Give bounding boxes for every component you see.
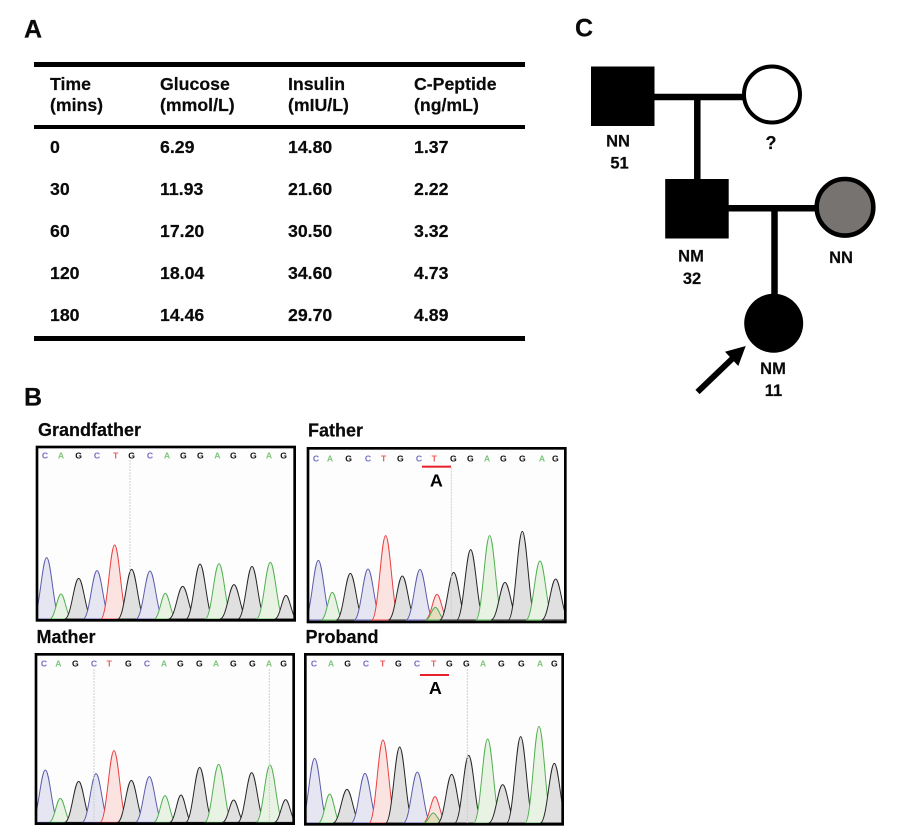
table row: time 180 <box>50 305 449 325</box>
chromatogram: Mather <box>19 654 297 824</box>
table row: time 120: 120 <box>50 263 80 283</box>
panel: C pedigree <box>575 14 873 400</box>
base calls: Father: A <box>327 453 334 463</box>
base calls: Proband: G <box>463 658 470 668</box>
base calls: Grandfather <box>42 450 287 460</box>
symbol: mother circle <box>817 179 873 236</box>
peaks: Proband trace <box>289 726 568 823</box>
connector: parents to proband <box>728 208 820 294</box>
table row: time 180: 4.89 <box>414 305 449 325</box>
label: father genotype and age <box>678 248 704 288</box>
table header row: Time <box>50 74 91 94</box>
base calls: Father: G <box>519 453 526 463</box>
mutation marker: T to A: A <box>430 470 443 490</box>
base calls: Proband: G <box>551 658 558 668</box>
base calls: Mather: C <box>144 658 151 668</box>
base calls: Mather: G <box>230 658 237 668</box>
base calls: Mather: G <box>72 658 79 668</box>
panel: A glucose tolerance table <box>24 16 525 341</box>
symbol: grandmother circle <box>744 66 800 122</box>
base calls: Proband: C <box>414 658 421 668</box>
base calls: Proband: A <box>537 658 544 668</box>
table header row: Insulin <box>288 74 345 94</box>
symbol: proband circle <box>744 294 803 353</box>
table row: time 30: 30 <box>50 179 70 199</box>
mutation marker: T to A <box>422 466 451 490</box>
base calls: Grandfather: G <box>230 450 237 460</box>
base calls: Grandfather: G <box>250 450 257 460</box>
base calls: Father: C <box>416 453 423 463</box>
table header row: (mIU/L) <box>288 95 349 115</box>
peaks: Father trace <box>289 531 570 620</box>
table row: time 30: 21.60 <box>288 179 332 199</box>
base calls: Grandfather: G <box>197 450 204 460</box>
table header row: C-Peptide <box>414 74 497 94</box>
table header row: (mmol/L) <box>160 95 235 115</box>
base calls: Father: G <box>500 453 507 463</box>
base calls: Grandfather: G <box>280 450 287 460</box>
base calls: Grandfather: A <box>164 450 171 460</box>
base calls: Proband <box>311 658 558 668</box>
base calls: Father: A <box>484 453 491 463</box>
table row: time 30: 2.22 <box>414 179 449 199</box>
chromatogram: Father <box>289 448 570 622</box>
peaks: Mather trace <box>19 751 297 822</box>
heading: Grandfather: Grandfather <box>38 420 141 440</box>
table row: time 180: 29.70 <box>288 305 332 325</box>
table row: time 0: 0 <box>50 137 60 157</box>
table header row: Glucose <box>160 74 230 94</box>
base calls: Father: T <box>432 453 438 463</box>
base calls: Proband: C <box>311 658 318 668</box>
chromatogram: Proband <box>289 654 568 824</box>
base calls: Grandfather: C <box>42 450 49 460</box>
base calls: Proband: G <box>344 658 351 668</box>
base calls: Mather: C <box>41 658 48 668</box>
base calls: Mather <box>41 658 287 668</box>
base calls: Mather: C <box>91 658 98 668</box>
base calls: Mather: G <box>125 658 132 668</box>
base calls: Proband: G <box>498 658 505 668</box>
base calls: Grandfather: A <box>266 450 273 460</box>
base calls: Proband: C <box>363 658 370 668</box>
table row: time 60: 60 <box>50 221 70 241</box>
base calls: Grandfather: G <box>75 450 82 460</box>
table row: time 0: 14.80 <box>288 137 332 157</box>
label: father genotype and age: 32 <box>683 270 701 288</box>
base calls: Father: C <box>313 453 320 463</box>
label: grandmother unknown: ? <box>766 133 776 153</box>
base calls: Father: G <box>345 453 352 463</box>
table row: time 0 <box>50 137 449 157</box>
base calls: Father: G <box>552 453 559 463</box>
base calls: Proband: G <box>446 658 453 668</box>
table header row: (ng/mL) <box>414 95 479 115</box>
heading: Father: Father <box>308 420 363 440</box>
label: father genotype and age: NM <box>678 248 704 266</box>
base calls: Mather: A <box>213 658 220 668</box>
panel letter B: B <box>24 384 42 412</box>
table row: time 120: 4.73 <box>414 263 449 283</box>
base calls: Father: G <box>397 453 404 463</box>
label: grandfather genotype and age: 51 <box>610 154 629 172</box>
table header row: (mins) <box>50 95 103 115</box>
arrow: proband indicator <box>698 346 746 392</box>
base calls: Father: A <box>539 453 546 463</box>
table row: time 0: 1.37 <box>414 137 449 157</box>
peaks: Grandfather trace <box>19 545 297 619</box>
label: grandfather genotype and age: NN <box>606 132 630 150</box>
base calls: Grandfather: G <box>180 450 187 460</box>
table row: time 180: 14.46 <box>160 305 204 325</box>
base calls: Mather: A <box>55 658 62 668</box>
label: proband genotype and age <box>760 360 786 400</box>
base calls: Mather: G <box>177 658 184 668</box>
table row: time 60: 30.50 <box>288 221 332 241</box>
base calls: Proband: G <box>518 658 525 668</box>
base calls: Father <box>313 453 559 463</box>
mutation marker: T to A: A <box>429 678 442 698</box>
table row: time 180: 180 <box>50 305 80 325</box>
base calls: Grandfather: C <box>94 450 101 460</box>
table row: time 0: 6.29 <box>160 137 195 157</box>
base calls: Proband: A <box>328 658 335 668</box>
base calls: Mather: A <box>266 658 273 668</box>
label: proband genotype and age: 11 <box>765 382 782 400</box>
base calls: Father: G <box>450 453 457 463</box>
table row: time 60 <box>50 221 449 241</box>
base calls: Father: G <box>467 453 474 463</box>
label: grandfather genotype and age <box>606 132 630 172</box>
base calls: Grandfather: T <box>113 450 119 460</box>
symbol: father square <box>665 179 729 238</box>
table row: time 120: 18.04 <box>160 263 204 283</box>
label: mother genotype: NN <box>829 249 853 267</box>
panel letter C: C <box>575 14 593 42</box>
table row: time 120 <box>50 263 449 283</box>
base calls: Grandfather: C <box>147 450 154 460</box>
base calls: Mather: G <box>249 658 256 668</box>
table row: time 30 <box>50 179 449 199</box>
table row: time 120: 34.60 <box>288 263 332 283</box>
heading: Proband: Proband <box>306 627 379 647</box>
base calls: Grandfather: A <box>214 450 221 460</box>
table row: time 60: 3.32 <box>414 221 449 241</box>
base calls: Proband: G <box>395 658 402 668</box>
base calls: Mather: G <box>196 658 203 668</box>
base calls: Grandfather: G <box>128 450 135 460</box>
base calls: Mather: G <box>280 658 287 668</box>
heading: Mather: Mather <box>36 627 96 647</box>
base calls: Mather: T <box>107 658 113 668</box>
table header row <box>50 74 497 115</box>
table row: time 60: 17.20 <box>160 221 204 241</box>
connector: grandparents <box>654 97 745 180</box>
base calls: Proband: T <box>431 658 437 668</box>
base calls: Proband: T <box>380 658 386 668</box>
mutation marker: T to A <box>420 674 449 698</box>
base calls: Proband: A <box>480 658 487 668</box>
label: proband genotype and age: NM <box>760 360 786 378</box>
table row: time 30: 11.93 <box>160 179 203 199</box>
base calls: Mather: A <box>161 658 168 668</box>
symbol: grandfather square <box>591 66 654 126</box>
chromatogram: Grandfather <box>19 447 297 620</box>
base calls: Grandfather: A <box>58 450 65 460</box>
base calls: Father: T <box>381 453 387 463</box>
panel letter A: A <box>24 16 42 44</box>
base calls: Father: C <box>365 453 372 463</box>
